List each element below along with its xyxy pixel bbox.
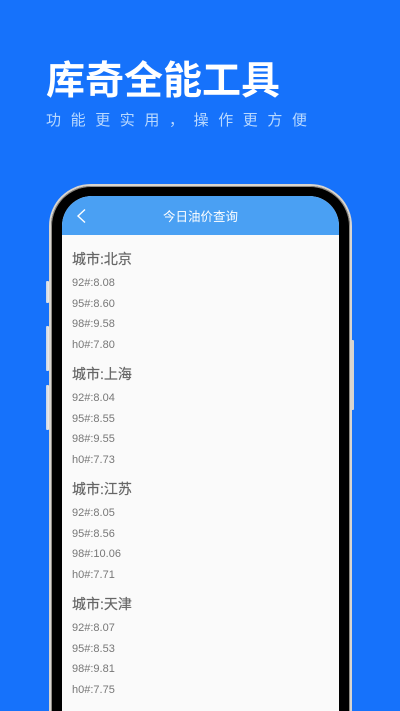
app header bar [62,196,339,235]
subtitle: 功能更实用，操作更方便 [46,112,317,129]
city heading: 城市:上海 [72,366,132,382]
panel: Beijing prices: 98#:9.58 [72,318,115,330]
panel: Jiangsu prices: 98#:10.06 [72,548,121,560]
panel: Shanghai prices: 98#:9.55 [72,433,115,445]
icon: left side buttons [46,281,49,430]
price lines: 92#:8.08 [72,277,115,289]
panel: Beijing prices: 95#:8.60 [72,298,115,310]
city heading: 城市:天津 [72,596,132,612]
panel: Jiangsu prices: h0#:7.71 [72,569,115,581]
panel: Tianjin prices [72,596,132,696]
icon: right side button [351,340,354,410]
phone frame [49,184,352,711]
panel: Shanghai prices: 95#:8.55 [72,413,115,425]
panel: Shanghai prices [72,366,132,466]
city heading: 城市:江苏 [72,481,132,497]
phone screen [62,196,339,711]
title: 库奇全能工具 [46,60,280,103]
panel: Tianjin prices: 95#:8.53 [72,643,115,655]
price lines: 92#:8.05 [72,507,115,519]
city heading: 城市:北京 [72,251,132,267]
panel: Jiangsu prices: 95#:8.56 [72,528,115,540]
panel: Tianjin prices: h0#:7.75 [72,684,115,696]
price lines: 92#:8.04 [72,392,115,404]
header title: 今日油价查询 [163,210,238,224]
panel: Beijing prices: h0#:7.80 [72,339,115,351]
panel: Tianjin prices: 98#:9.81 [72,663,115,675]
icon: back arrow [77,209,86,223]
panel: Shanghai prices: h0#:7.73 [72,454,115,466]
price lines: 92#:8.07 [72,622,115,634]
panel: Beijing prices [72,251,132,351]
panel: Jiangsu prices [72,481,132,581]
